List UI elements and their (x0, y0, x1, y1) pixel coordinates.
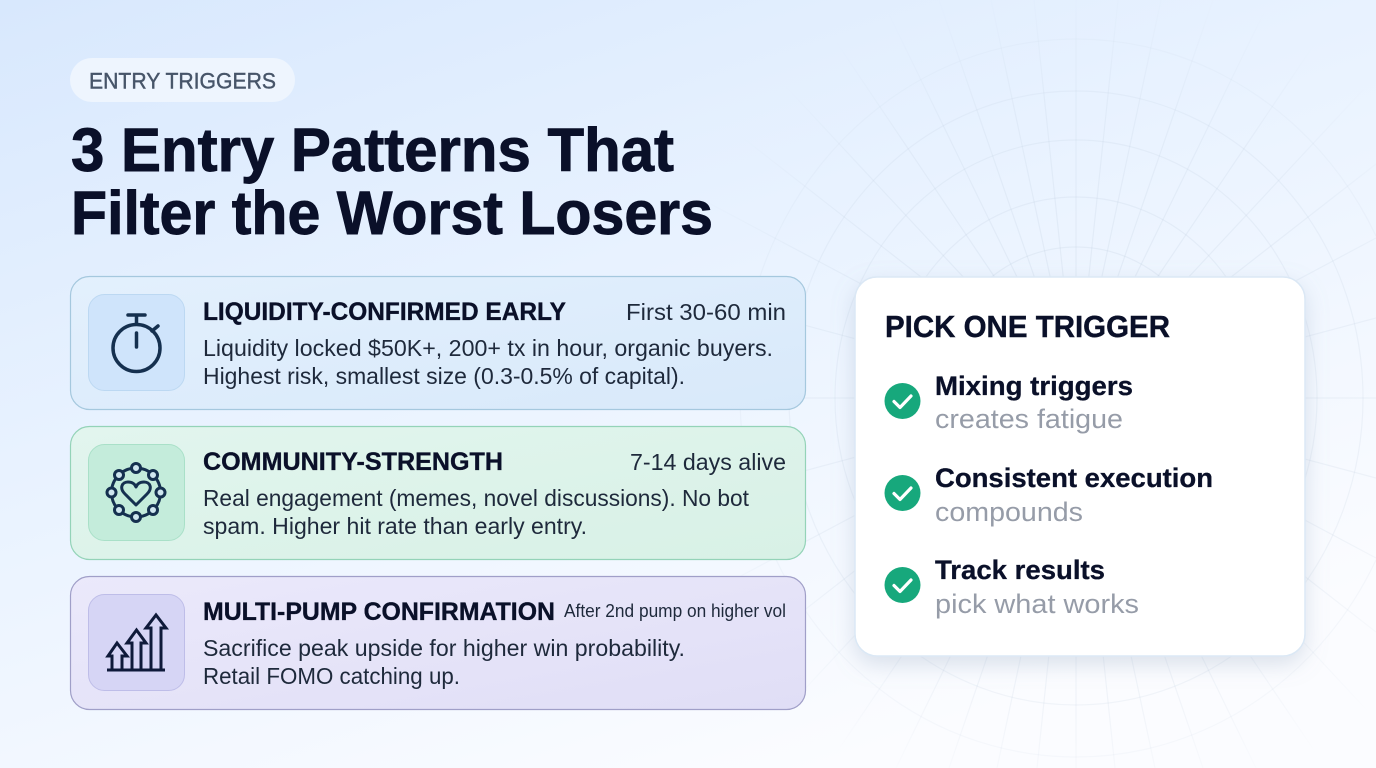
title (71, 116, 713, 247)
description: Retail FOMO catching up. (203, 663, 460, 689)
description (203, 635, 685, 689)
item: mixing triggers (884, 371, 1133, 434)
item: track results: Track results (935, 555, 1105, 585)
badge: entry triggers (70, 58, 295, 102)
panel: pick one trigger (855, 277, 1305, 656)
item: consistent execution: compounds (935, 497, 1083, 527)
description: spam. Higher hit rate than early entry. (203, 513, 587, 539)
description: Highest risk, smallest size (0.3-0.5% of capital). (203, 363, 685, 389)
icon: community heart (88, 444, 184, 540)
icon: rising arrows (88, 594, 184, 690)
timing label: 7-14 days alive (630, 449, 786, 475)
description: Sacrifice peak upside for higher win probability. (203, 635, 685, 661)
title: 3 Entry Patterns That (71, 116, 674, 184)
panel: liquidity-confirmed early (70, 276, 806, 410)
panel heading: PICK ONE TRIGGER (885, 309, 1170, 344)
description: Liquidity locked $50K+, 200+ tx in hour, organic buyers. (203, 335, 773, 361)
item: consistent execution (884, 463, 1213, 527)
heading: MULTI-PUMP CONFIRMATION (203, 598, 555, 626)
panel: community-strength (70, 426, 806, 560)
timing label: First 30-60 min (626, 299, 786, 325)
title: Filter the Worst Losers (71, 179, 713, 247)
item: track results (884, 555, 1139, 619)
heading: LIQUIDITY-CONFIRMED EARLY (203, 298, 566, 326)
description: Real engagement (memes, novel discussions). No bot (203, 485, 750, 511)
radial grid pattern (640, 0, 1376, 768)
item: consistent execution: Consistent execution (935, 463, 1213, 493)
heading: COMMUNITY-STRENGTH (203, 448, 503, 476)
icon: stopwatch (88, 294, 184, 390)
item: mixing triggers: creates fatigue (935, 404, 1123, 434)
item: mixing triggers: Mixing triggers (935, 371, 1133, 401)
panel: multi-pump confirmation (70, 576, 806, 710)
item: track results: pick what works (935, 589, 1139, 619)
timing label: After 2nd pump on higher vol (564, 601, 786, 621)
badge: entry triggers: ENTRY TRIGGERS (89, 68, 276, 94)
description (203, 485, 750, 539)
description (203, 335, 773, 389)
